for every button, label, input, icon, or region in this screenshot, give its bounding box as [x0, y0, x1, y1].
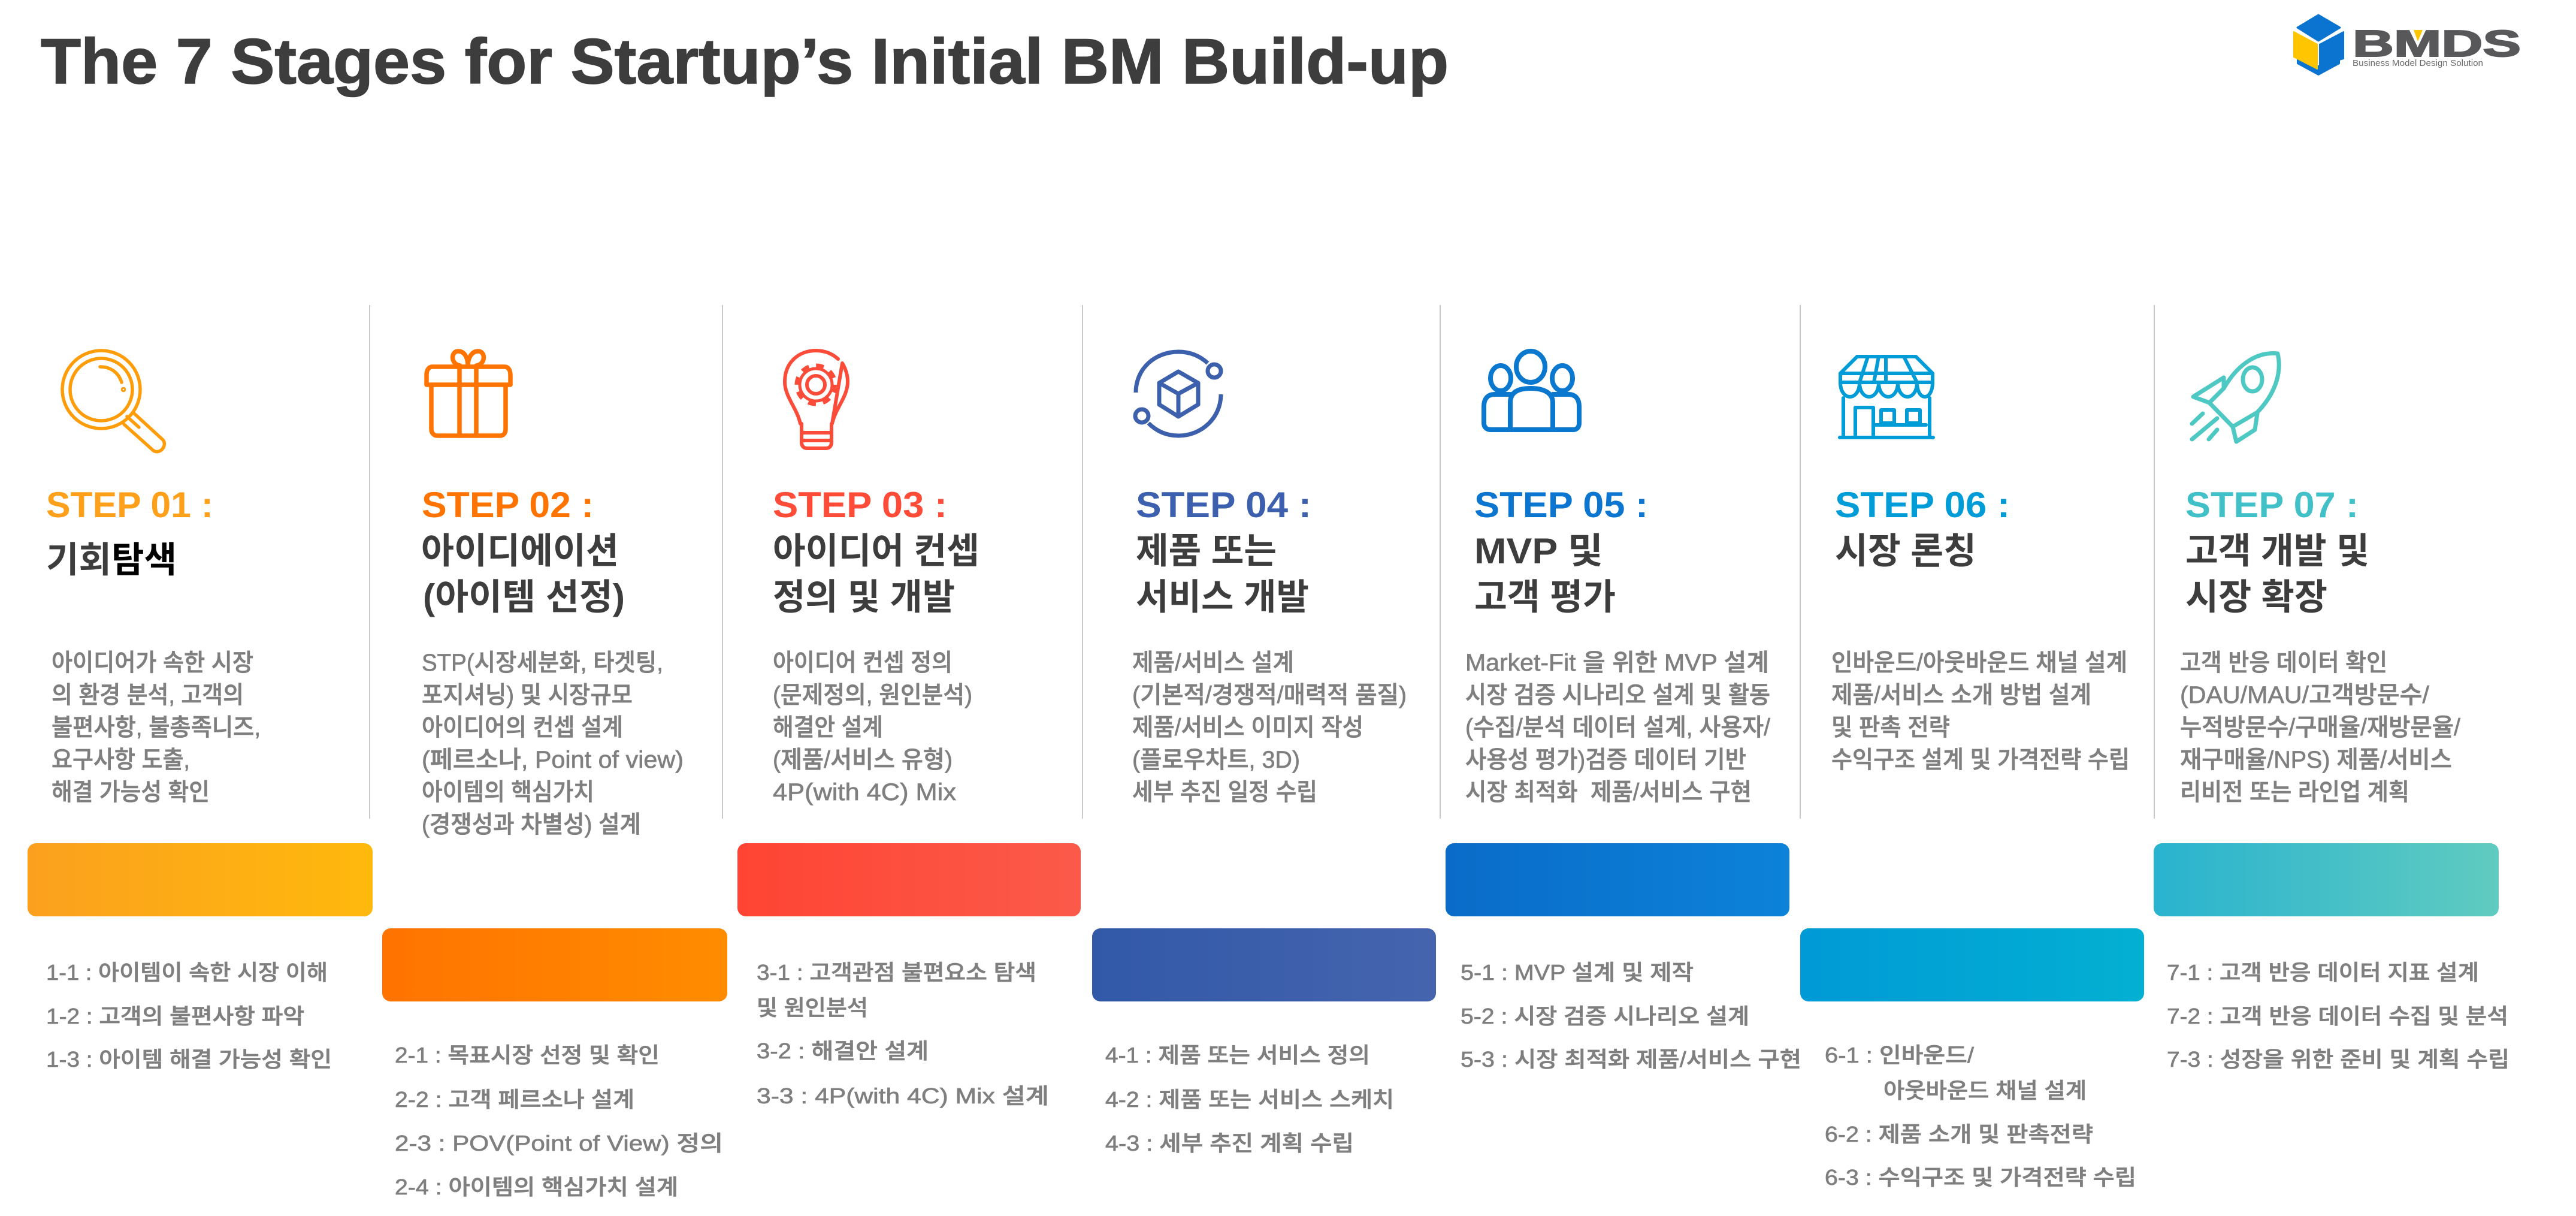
description: 리비전 또는 라인업 계획	[2180, 779, 2409, 805]
heading: 서비스 개발	[1136, 577, 1309, 617]
description: 아이디어 컨셉 정의	[773, 650, 953, 676]
sub-steps: 5-2 : 시장 검증 시나리오 설계	[1461, 1004, 1749, 1028]
panel: step 2	[382, 351, 727, 1199]
description: (제품/서비스 유형)	[773, 747, 953, 773]
description: 해결 가능성 확인	[52, 779, 210, 805]
color bar	[1800, 928, 2144, 1001]
icon: cube cycle	[1135, 352, 1221, 436]
color bar	[1446, 843, 1789, 916]
icon: magnifier	[62, 351, 164, 452]
step label: STEP 02 :	[422, 485, 594, 525]
sub-steps	[46, 960, 332, 1072]
heading	[421, 531, 625, 617]
sub-steps	[757, 960, 1049, 1108]
icon: light bulb with gear	[785, 351, 848, 448]
panel: step 1	[28, 351, 373, 1072]
description: (페르소나, Point of view)	[422, 747, 684, 773]
color bar	[382, 928, 727, 1001]
panel: step 4	[1092, 352, 1436, 1155]
panel: step 6	[1800, 357, 2144, 1190]
sub-steps: 5-1 : MVP 설계 및 제작	[1461, 960, 1694, 985]
sub-steps	[1825, 1043, 2136, 1190]
sub-steps: 4-2 : 제품 또는 서비스 스케치	[1105, 1087, 1394, 1112]
sub-steps: 2-4 : 아이템의 핵심가치 설계	[395, 1175, 678, 1199]
description: 아이템의 핵심가치	[422, 779, 594, 805]
description: 해결안 설계	[773, 714, 883, 741]
description: (문제정의, 원인분석)	[773, 682, 972, 708]
icon: people	[1484, 351, 1579, 430]
step label: STEP 07 :	[2185, 485, 2359, 525]
description	[52, 650, 261, 805]
heading	[2185, 531, 2369, 617]
sub-steps	[1461, 960, 1801, 1072]
sub-steps: 1-3 : 아이템 해결 가능성 확인	[46, 1047, 332, 1072]
icon: rocket	[2192, 354, 2279, 442]
step label: STEP 03 :	[773, 485, 947, 525]
step label: STEP 01 :	[46, 485, 213, 525]
sub-steps: 6-2 : 제품 소개 및 판촉전략	[1825, 1122, 2093, 1146]
step label: STEP 06 :	[1835, 485, 2010, 525]
heading: MVP 및	[1474, 531, 1603, 571]
description: (DAU/MAU/고객방문수/	[2180, 682, 2430, 708]
sub-steps	[395, 1043, 723, 1199]
sub-steps: 및 원인분석	[757, 995, 868, 1020]
sub-steps: 6-1 : 인바운드/	[1825, 1043, 1974, 1067]
description: (경쟁성과 차별성) 설계	[422, 811, 641, 838]
color bar	[2154, 843, 2499, 916]
description: 고객 반응 데이터 확인	[2180, 650, 2387, 676]
title: The 7 Stages for Startup’s Initial BM Build-up	[41, 25, 1449, 97]
heading	[1474, 531, 1616, 617]
description: 요구사항 도출,	[52, 747, 190, 773]
logo: BMDS	[2294, 15, 2521, 75]
description: 아이디어의 컨셉 설계	[422, 714, 623, 741]
sub-steps: 3-2 : 해결안 설계	[757, 1039, 929, 1063]
description: 사용성 평가)검증 데이터 기반	[1465, 747, 1746, 773]
panel: step 7	[2154, 354, 2510, 1072]
heading: 아이디어 컨셉	[773, 531, 979, 571]
panel: step 3	[737, 351, 1081, 1108]
description: 불편사항, 불총족니즈,	[52, 714, 261, 741]
sub-steps: 1-2 : 고객의 불편사항 파악	[46, 1004, 304, 1028]
description: 시장 검증 시나리오 설계 및 활동	[1465, 682, 1770, 708]
description: 재구매율/NPS) 제품/서비스	[2180, 747, 2452, 773]
heading	[1136, 531, 1309, 617]
description: 아이디어가 속한 시장	[52, 650, 253, 676]
color bar	[1092, 928, 1436, 1001]
description: 수익구조 설계 및 가격전략 수립	[1831, 747, 2130, 773]
heading: 기회탐색	[46, 540, 177, 580]
sub-steps: 3-3 : 4P(with 4C) Mix 설계	[757, 1084, 1049, 1108]
description	[773, 650, 972, 805]
color bar	[737, 843, 1081, 916]
heading: 시장 확장	[2185, 577, 2327, 617]
heading: 고객 개발 및	[2185, 531, 2369, 571]
heading: 제품 또는	[1136, 531, 1277, 571]
description: 포지셔닝) 및 시장규모	[422, 682, 633, 708]
sub-steps: 아웃바운드 채널 설계	[1883, 1078, 2087, 1103]
description: (플로우차트, 3D)	[1132, 747, 1300, 773]
sub-steps: 7-1 : 고객 반응 데이터 지표 설계	[2167, 960, 2479, 985]
sub-steps: 1-1 : 아이템이 속한 시장 이해	[46, 960, 328, 985]
panel: step 5	[1446, 351, 1801, 1072]
heading: 고객 평가	[1474, 577, 1616, 617]
description: 인바운드/아웃바운드 채널 설계	[1831, 650, 2127, 676]
description: 및 판촉 전략	[1831, 714, 1950, 741]
description: STP(시장세분화, 타겟팅,	[422, 650, 663, 676]
heading: (아이템 선정)	[423, 577, 625, 617]
heading: 정의 및 개발	[773, 577, 955, 617]
description: 제품/서비스 이미지 작성	[1132, 714, 1363, 741]
step label: STEP 05 :	[1474, 485, 1648, 525]
step label: STEP 04 :	[1136, 485, 1311, 525]
sub-steps: 2-2 : 고객 페르소나 설계	[395, 1087, 634, 1112]
heading	[773, 531, 979, 617]
description: 4P(with 4C) Mix	[773, 779, 956, 805]
sub-steps: 6-3 : 수익구조 및 가격전략 수립	[1825, 1165, 2136, 1190]
sub-steps: 2-1 : 목표시장 선정 및 확인	[395, 1043, 660, 1067]
description: 의 환경 분석, 고객의	[52, 682, 244, 708]
description: 세부 추진 일정 수립	[1132, 779, 1317, 805]
description: (수집/분석 데이터 설계, 사용자/	[1465, 714, 1771, 741]
icon: gift	[427, 351, 510, 436]
description: 시장 최적화 제품/서비스 구현	[1465, 779, 1752, 805]
sub-steps	[1105, 1043, 1394, 1155]
description: (기본적/경쟁적/매력적 품질)	[1132, 682, 1407, 708]
description	[1465, 650, 1771, 805]
sub-steps: 4-3 : 세부 추진 계획 수립	[1105, 1131, 1354, 1155]
heading: 아이디에이션	[421, 531, 619, 571]
logo: BMDS: BMDS	[2353, 23, 2521, 65]
sub-steps	[2167, 960, 2510, 1072]
description: 제품/서비스 설계	[1132, 650, 1294, 676]
description: 누적방문수/구매율/재방문율/	[2180, 714, 2461, 741]
description: 제품/서비스 소개 방법 설계	[1831, 682, 2091, 708]
description: Market-Fit 을 위한 MVP 설계	[1465, 650, 1769, 676]
sub-steps: 5-3 : 시장 최적화 제품/서비스 구현	[1461, 1047, 1801, 1072]
color bar	[28, 843, 373, 916]
sub-steps: 4-1 : 제품 또는 서비스 정의	[1105, 1043, 1370, 1067]
description	[1132, 650, 1407, 805]
description	[1831, 650, 2130, 773]
sub-steps: 7-2 : 고객 반응 데이터 수집 및 분석	[2167, 1004, 2508, 1028]
sub-steps: 2-3 : POV(Point of View) 정의	[395, 1131, 723, 1155]
description	[422, 650, 684, 838]
description	[2180, 650, 2461, 805]
logo: BMDS: Business Model Design Solution	[2353, 58, 2483, 68]
sub-steps: 3-1 : 고객관점 불편요소 탐색	[757, 960, 1036, 985]
heading: 시장 론칭	[1835, 531, 1976, 571]
sub-steps: 7-3 : 성장을 위한 준비 및 계획 수립	[2167, 1047, 2510, 1072]
icon: storefront	[1840, 357, 1933, 437]
